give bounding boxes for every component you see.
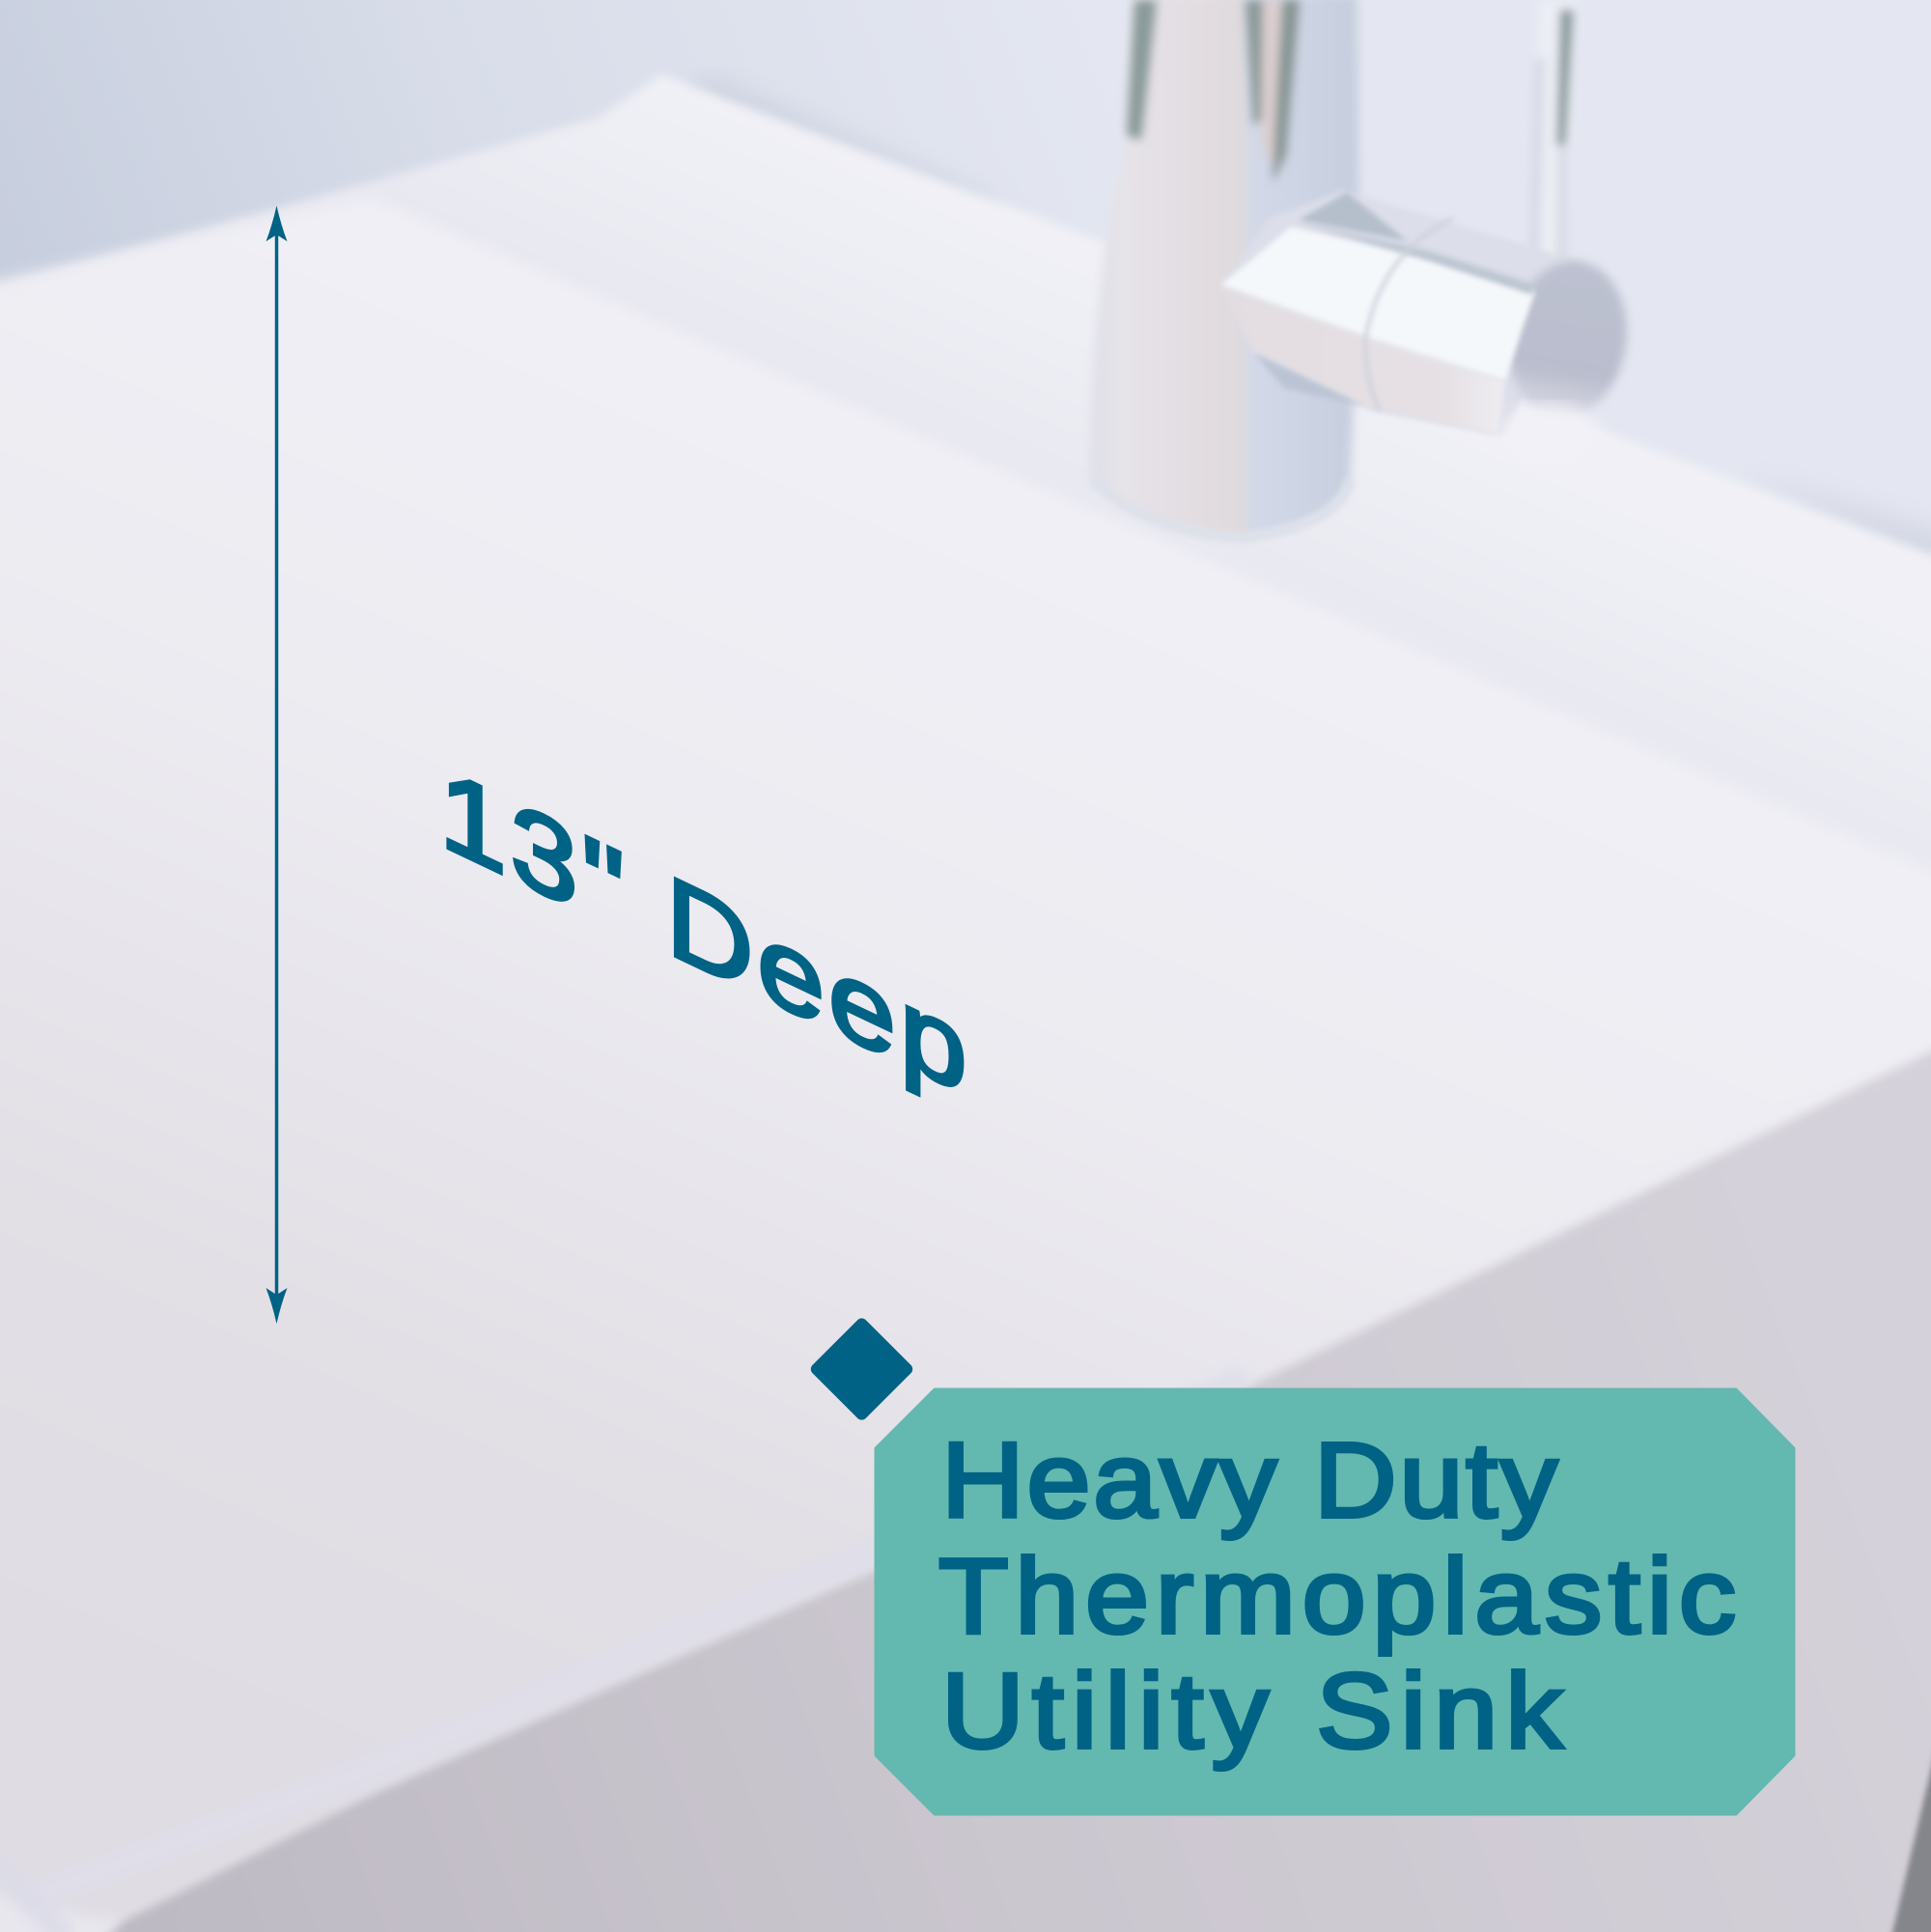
- faucet: [1090, 0, 1638, 538]
- handle lower band: [1221, 286, 1505, 434]
- wall shadow along sink back edge: [695, 92, 985, 217]
- callout text: Thermoplastic: [938, 1537, 1736, 1656]
- callout panel: [876, 1389, 1794, 1814]
- handle top shade: [1299, 192, 1408, 241]
- handle bright strip: [1221, 227, 1535, 380]
- handle collar ring: [1365, 218, 1453, 410]
- handle end cap: [1497, 252, 1638, 428]
- faucet base ring: [1092, 480, 1350, 538]
- diamond marker: [808, 1316, 915, 1422]
- callout text: [938, 1421, 1736, 1771]
- faucet body: [1090, 0, 1359, 538]
- callout background: [876, 1389, 1794, 1814]
- depth arrow: [266, 206, 288, 1324]
- front rim highlight: [31, 1376, 1245, 1898]
- callout text: Utility Sink: [941, 1652, 1563, 1771]
- left corner highlight: [0, 1859, 68, 1932]
- sink deck and back rim: [0, 74, 1931, 1062]
- shadow under handle: [1254, 353, 1365, 406]
- reflection under cap: [1499, 406, 1600, 467]
- lever: [1529, 0, 1578, 275]
- depth label: 13" Deep: [439, 743, 966, 1119]
- dark corner lower right: [1890, 1728, 1931, 1932]
- handle cylinder: [1221, 190, 1583, 436]
- faucet reflections: [1127, 0, 1300, 183]
- wall: [0, 0, 1931, 772]
- handle top band right: [1299, 222, 1535, 294]
- front face of sink: [58, 1033, 1931, 1932]
- wall shadow on right: [1738, 473, 1931, 589]
- callout text: Heavy Duty: [941, 1421, 1558, 1540]
